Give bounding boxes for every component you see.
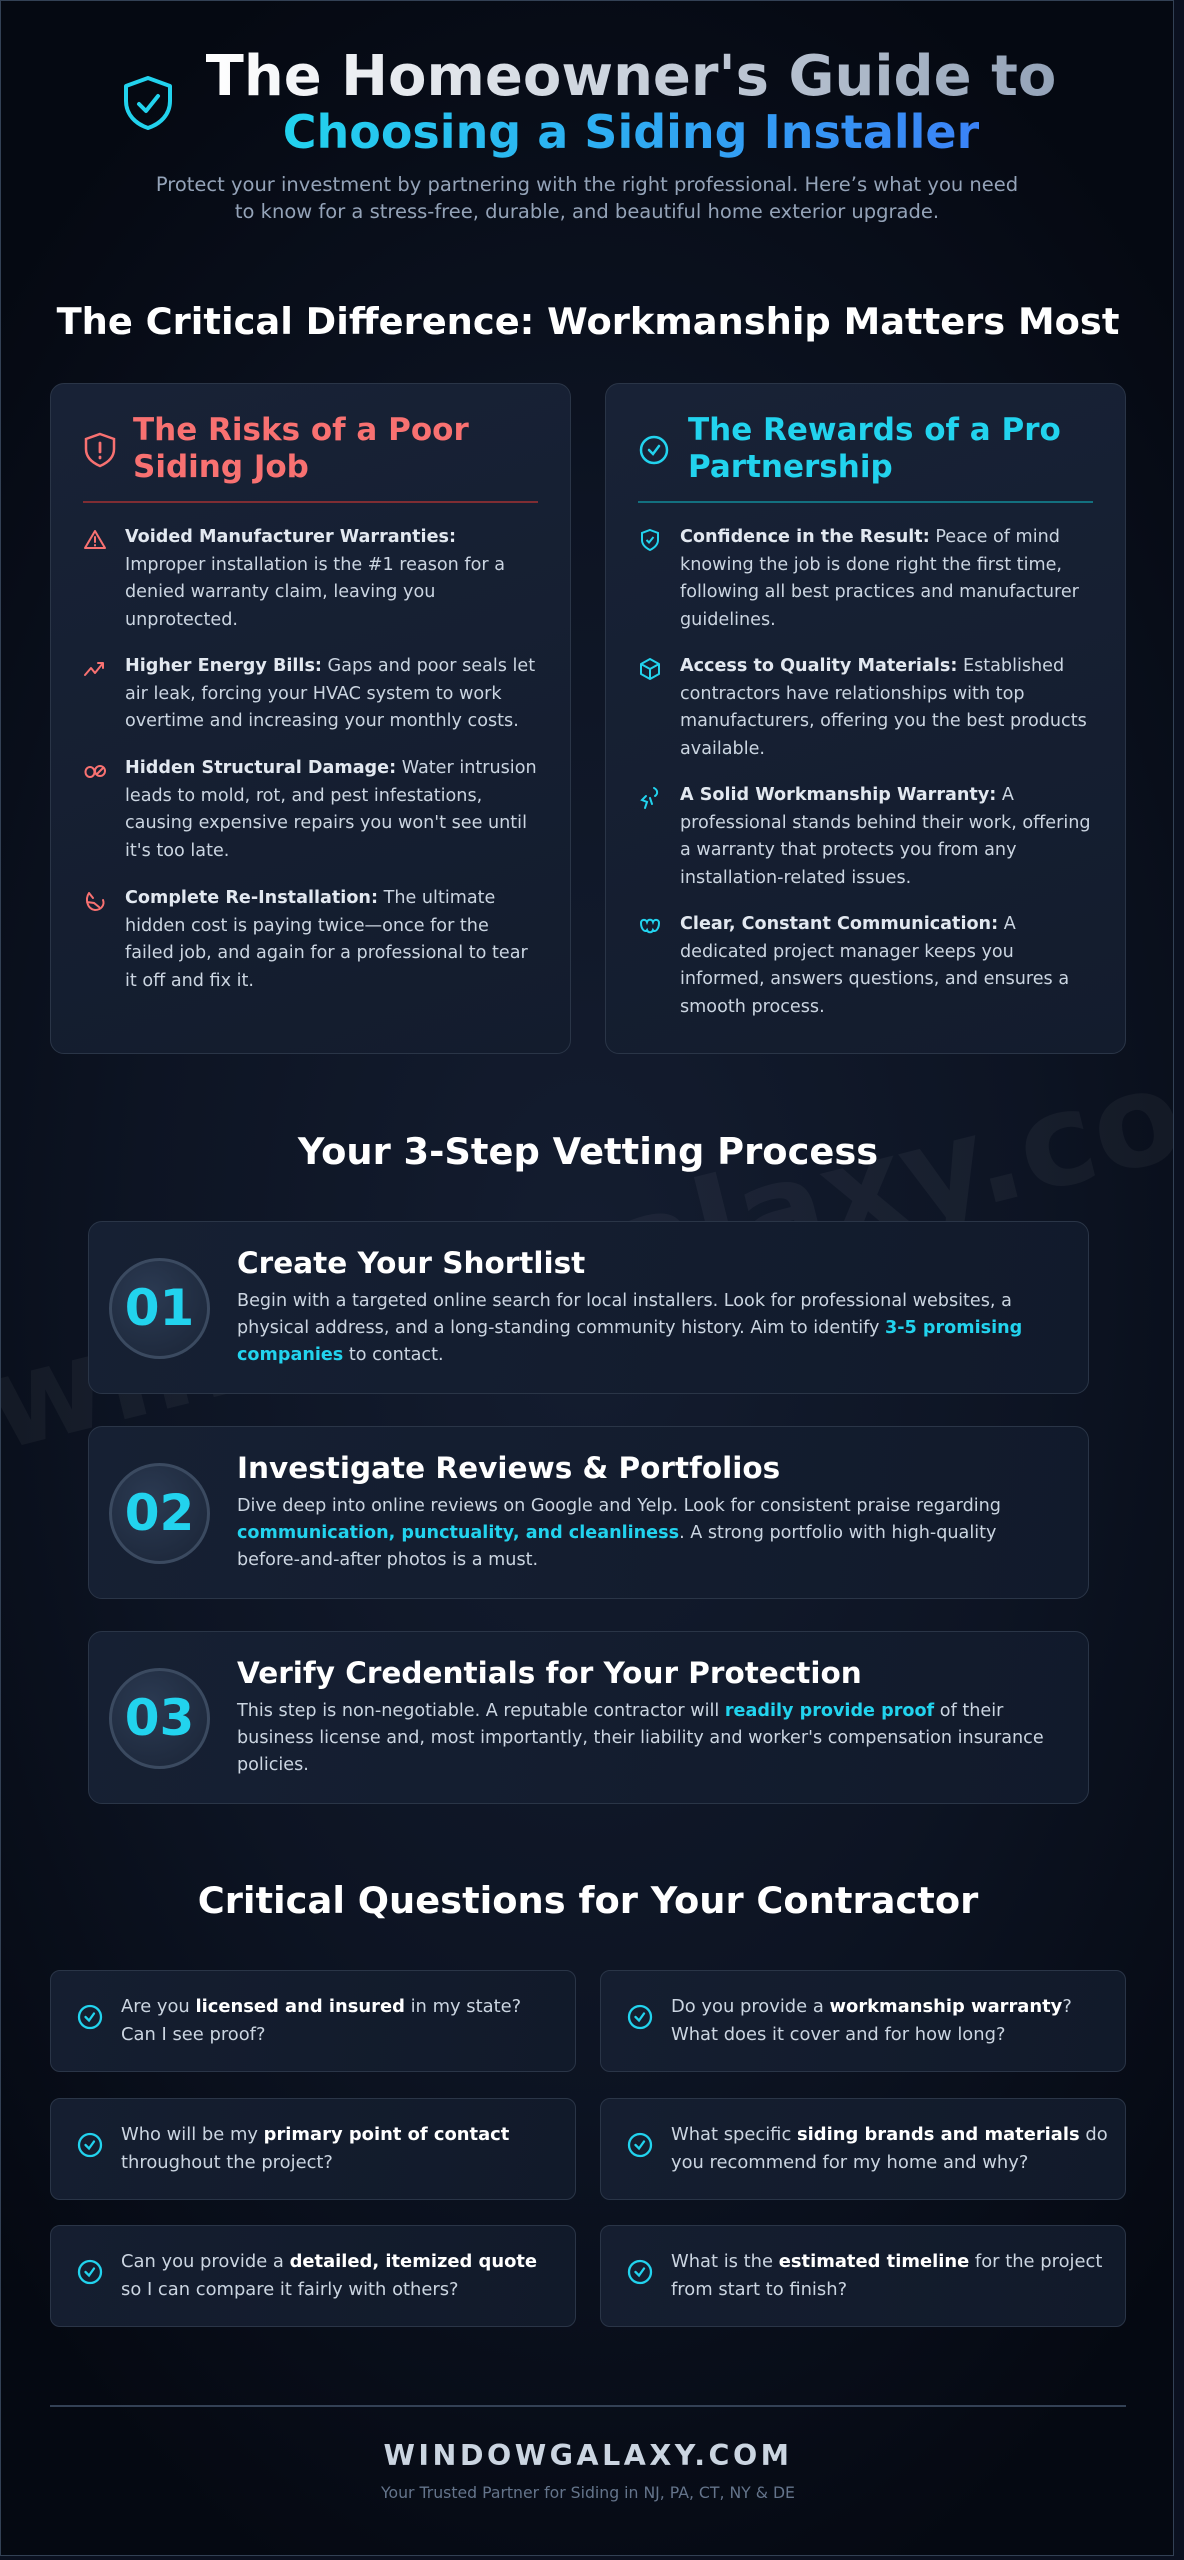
item: confidence: Confidence in the Result: Peace of mind knowing the job is done right the first time, following all best practices and manufacturer guidelines. xyxy=(680,527,1079,630)
step title: Create Your Shortlist xyxy=(237,1246,585,1280)
item: energy: Higher Energy Bills: Gaps and poor seals let air leak, forcing your HVAC system to work overtime and increasing your monthly costs. xyxy=(125,656,535,731)
heading: vetting: Your 3-Step Vetting Process xyxy=(298,1130,878,1173)
heading: critical difference: The Critical Difference: Workmanship Matters Most xyxy=(57,300,1119,343)
step 1 xyxy=(88,1221,1089,1394)
question 5: so I can compare it fairly with others? xyxy=(121,2279,459,2300)
question 1 xyxy=(50,1970,576,2072)
item: structural: Hidden Structural Damage: Water intrusion leads to mold, rot, and pest infestations, causing expensive repairs you won't see until it's too late. xyxy=(125,758,537,861)
step body: Dive deep into online reviews on Google and Yelp. Look for consistent praise regarding communication, punctuality, and cleanliness. A strong portfolio with high-quality before-and-after photos is a must. xyxy=(237,1496,1001,1570)
panel: rewards xyxy=(605,383,1126,1054)
step body: This step is non-negotiable. A reputable contractor will readily provide proof of their business license and, most importantly, their liability and worker's compensation insurance policies. xyxy=(237,1701,1044,1775)
question 6 xyxy=(600,2225,1126,2327)
step body: Begin with a targeted online search for local installers. Look for professional websites, a physical address, and a long-standing community history. Aim to identify 3-5 promising companies to contact. xyxy=(237,1291,1022,1365)
question 1: Are you licensed and insured in my state? xyxy=(121,1996,521,2017)
item: communication: Clear, Constant Communication: A dedicated project manager keeps you informed, answers questions, and ensures a smooth process. xyxy=(680,914,1069,1017)
item: reinstall: Complete Re-Installation: The ultimate hidden cost is paying twice—once for the failed job, and again for a professional to tear it off and fix it. xyxy=(125,888,528,991)
question 6: from start to finish? xyxy=(671,2279,847,2300)
item: warranty: A Solid Workmanship Warranty: A professional stands behind their work, offering a warranty that protects you from any installation-related issues. xyxy=(680,785,1091,888)
question 1: Can I see proof? xyxy=(121,2024,265,2045)
step title: Investigate Reviews & Portfolios xyxy=(237,1451,780,1485)
item: materials: Access to Quality Materials: Established contractors have relationships with top manufacturers, offering you the best products available. xyxy=(680,656,1087,759)
panel title: Siding Job xyxy=(133,449,309,485)
footer tagline: Your Trusted Partner for Siding in NJ, PA, CT, NY & DE xyxy=(381,2483,795,2502)
step 3 xyxy=(88,1631,1089,1804)
heading: questions: Critical Questions for Your Contractor xyxy=(198,1879,978,1922)
question 3 xyxy=(50,2098,576,2200)
question 4 xyxy=(600,2098,1126,2200)
number circle xyxy=(109,1463,210,1564)
item: warranties: Voided Manufacturer Warranties: Improper installation is the #1 reason for a denied warranty claim, leaving you unprotected. xyxy=(125,527,505,630)
question 3: Who will be my primary point of contact xyxy=(121,2124,509,2145)
panel: risks xyxy=(50,383,571,1054)
question 5 xyxy=(50,2225,576,2327)
step title: Verify Credentials for Your Protection xyxy=(237,1656,862,1690)
question 5: Can you provide a detailed, itemized quote xyxy=(121,2251,537,2272)
subtitle title: Choosing a Siding Installer xyxy=(283,105,979,159)
panel title: The Rewards of a Pro xyxy=(688,412,1061,448)
number circle: 02 xyxy=(125,1484,194,1542)
icon: check circle xyxy=(640,436,668,464)
icon: risk shield xyxy=(84,432,116,468)
question 2: What does it cover and for how long? xyxy=(671,2024,1005,2045)
question 6: What is the estimated timeline for the project xyxy=(671,2251,1102,2272)
number circle xyxy=(109,1668,210,1769)
footer brand: WINDOWGALAXY.COM xyxy=(383,2439,793,2472)
number circle: 01 xyxy=(125,1279,194,1337)
panel title: Partnership xyxy=(688,449,893,485)
number circle: 03 xyxy=(125,1689,194,1747)
question 2 xyxy=(600,1970,1126,2072)
step 2 xyxy=(88,1426,1089,1599)
icon: header shield xyxy=(124,76,172,130)
question 4: What specific siding brands and materials do xyxy=(671,2124,1108,2145)
question 4: you recommend for my home and why? xyxy=(671,2152,1028,2173)
intro text: Protect your investment by partnering with the right professional. Here’s what you need to know for a stress-free, durable, and beautiful home exterior upgrade. xyxy=(156,173,1018,223)
panel title: The Risks of a Poor xyxy=(133,412,469,448)
title: The Homeowner's Guide to xyxy=(206,44,1056,109)
panel title xyxy=(688,412,1061,485)
question 2: Do you provide a workmanship warranty? xyxy=(671,1996,1072,2017)
question 3: throughout the project? xyxy=(121,2152,333,2173)
panel title xyxy=(133,412,469,485)
number circle xyxy=(109,1258,210,1359)
